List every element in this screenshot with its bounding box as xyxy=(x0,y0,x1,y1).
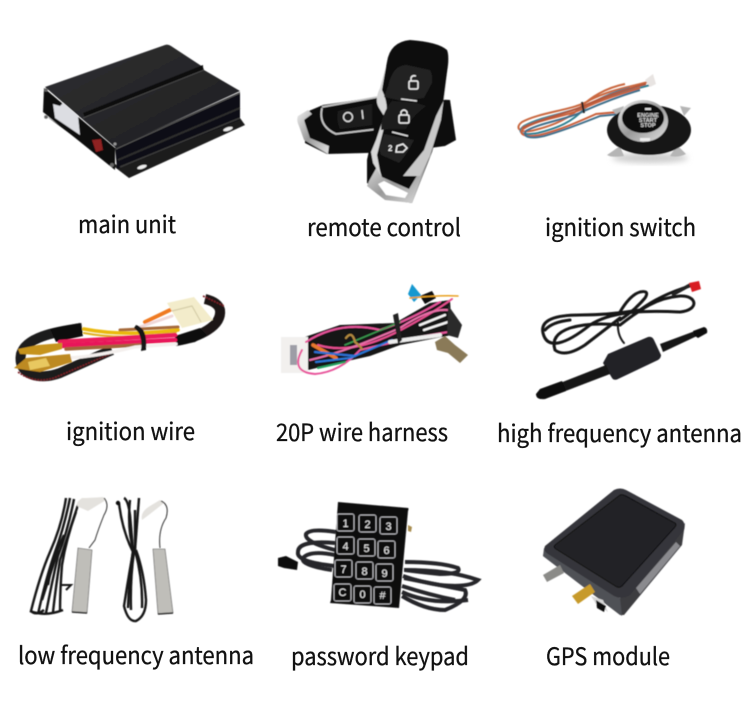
icon: keypad with cables: 7 xyxy=(340,564,347,576)
label: ignition switch: ignition switch xyxy=(545,208,696,243)
icon: key fobs: 2 xyxy=(388,144,393,153)
icon: keypad with cables: 4 xyxy=(342,541,349,553)
panel: GPS module xyxy=(543,488,685,672)
panel: ignition wire xyxy=(14,296,224,447)
panel: password keypad xyxy=(278,502,478,672)
icon: keypad with cables: 3 xyxy=(385,521,392,533)
icon: GPS box xyxy=(543,488,685,616)
label: remote control: remote control xyxy=(307,208,461,243)
panel: ignition switch xyxy=(518,74,696,243)
label: low frequency antenna: low frequency antenna xyxy=(18,636,254,671)
icon: start stop button with wires: ENGINE xyxy=(637,113,659,119)
icon: second low frequency antenna xyxy=(116,498,173,621)
label: 20P wire harness: 20P wire harness xyxy=(276,413,448,448)
icon: first low frequency antenna xyxy=(30,497,107,614)
icon: keypad with cables: 9 xyxy=(381,568,388,580)
label: ignition wire: ignition wire xyxy=(66,412,195,447)
icon: keypad with cables: 5 xyxy=(363,543,370,555)
icon: start stop button with wires: START xyxy=(639,118,658,124)
panel: high frequency antenna xyxy=(497,281,742,449)
icon: keypad with cables: 2 xyxy=(364,519,371,531)
icon: keypad with cables xyxy=(278,502,478,610)
icon: keypad with cables: 1 xyxy=(342,518,349,530)
label: password keypad: password keypad xyxy=(291,637,469,672)
icon: keypad with cables: 8 xyxy=(361,566,368,578)
icon: keypad with cables: 0 xyxy=(359,589,366,601)
icon: ignition wire loom xyxy=(14,296,224,380)
icon: keypad with cables: 6 xyxy=(383,545,390,557)
icon: keypad with cables: C xyxy=(339,587,347,599)
icon: start stop button with wires xyxy=(518,74,691,163)
icon: start stop button with wires: STOP xyxy=(640,123,656,129)
icon: dash antenna with cable xyxy=(536,281,707,399)
panel: remote control xyxy=(297,40,461,243)
panel: main unit xyxy=(42,45,245,240)
icon: keypad with cables: # xyxy=(379,590,386,602)
label: GPS module: GPS module xyxy=(546,637,670,672)
icon: main unit box xyxy=(42,45,245,178)
icon: key fobs xyxy=(297,40,456,203)
panel: low frequency antenna xyxy=(18,497,254,671)
panel: 20P wire harness xyxy=(276,284,468,448)
icon: wire harness xyxy=(281,284,468,374)
label: main unit: main unit xyxy=(78,205,176,240)
